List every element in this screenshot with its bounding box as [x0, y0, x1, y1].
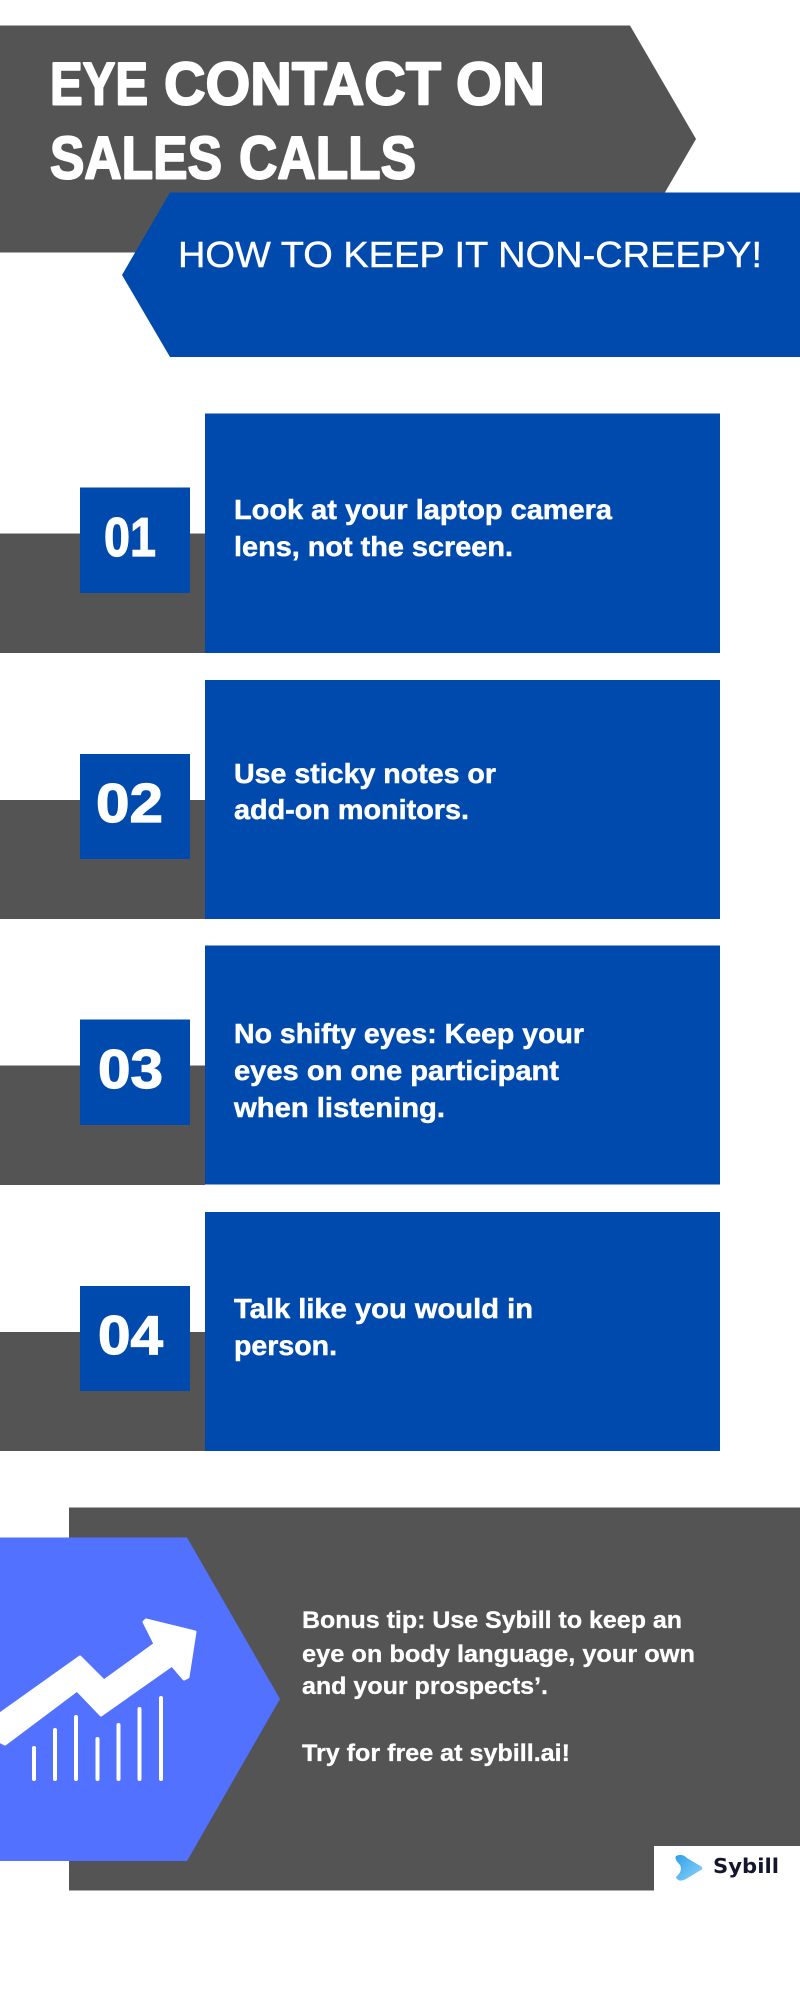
panel: step 02: [0, 680, 720, 919]
title: CONTACT: [164, 50, 441, 118]
icon panel: [0, 1538, 280, 1861]
step number 03: [80, 1020, 190, 1125]
step number 01: 01: [104, 506, 156, 568]
panel: step 01: [0, 414, 720, 653]
step number 03: 03: [98, 1038, 163, 1100]
step text 03: [233, 1018, 584, 1123]
icon: Sybill mark: [676, 1855, 702, 1881]
logo wordmark: Sybill: [713, 1854, 779, 1878]
bonus tip text: Try for free at sybill.ai!: [302, 1740, 570, 1767]
bonus tip text: [302, 1607, 695, 1767]
logo: Sybill: [654, 1846, 800, 1890]
title: EYE: [50, 50, 148, 118]
step text 03: No shifty eyes: Keep your: [234, 1018, 584, 1049]
step text 01: [234, 494, 612, 562]
step text 02: [234, 758, 496, 825]
step text 04: Talk like you would in: [234, 1293, 533, 1324]
panel: step 03: [0, 946, 720, 1185]
step text 02: add-on monitors.: [234, 794, 469, 825]
step text 01: Look at your laptop camera: [234, 494, 612, 525]
step number 02: 02: [96, 772, 163, 834]
step text 04: person.: [234, 1330, 337, 1361]
title: SALES: [50, 124, 222, 192]
step text 02: Use sticky notes or: [234, 758, 496, 789]
step number 04: 04: [98, 1304, 163, 1366]
panel: step 04: [0, 1212, 720, 1451]
bonus tip text: Bonus tip: Use Sybill to keep an: [302, 1607, 682, 1634]
bonus tip text: and your prospects’.: [302, 1673, 548, 1700]
title: CALLS: [239, 124, 416, 192]
step text 03: eyes on one participant: [234, 1055, 559, 1086]
title: ON: [456, 50, 545, 118]
icon: bar chart: [34, 1698, 161, 1779]
icon: rising arrow: [0, 1620, 195, 1744]
panel: subtitle banner: [122, 192, 800, 357]
step text 01: lens, not the screen.: [234, 531, 513, 562]
bonus tip text: eye on body language, your own: [302, 1641, 695, 1668]
title: [50, 50, 545, 192]
subtitle: HOW TO KEEP IT NON-CREEPY!: [178, 234, 762, 275]
step number 04: [80, 1286, 190, 1391]
panel: bonus tip: [0, 1508, 800, 1890]
step number 02: [80, 754, 190, 859]
step text 04: [234, 1293, 533, 1361]
step number 01: [80, 488, 190, 593]
step text 03: when listening.: [233, 1092, 445, 1123]
panel: title banner: [0, 26, 696, 252]
